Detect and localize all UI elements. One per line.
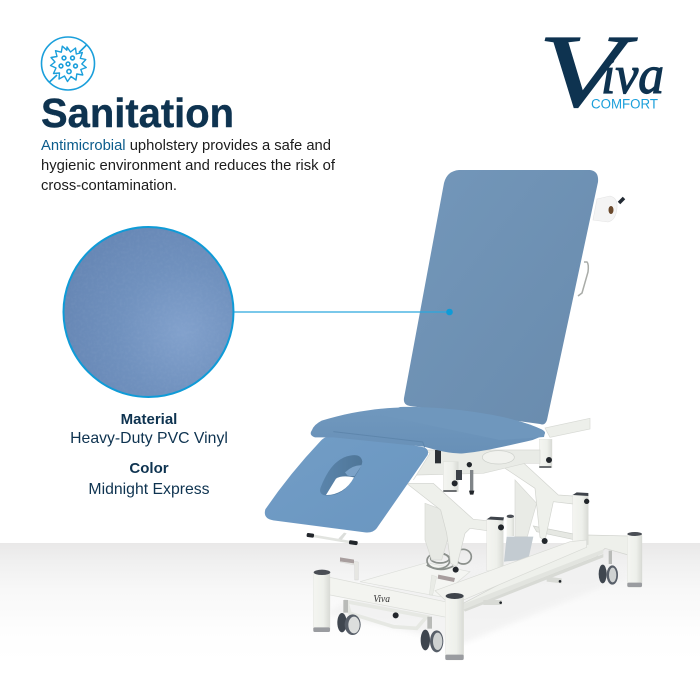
material and color labels: Heavy-Duty PVC Vinyl <box>70 430 228 447</box>
material and color labels: Midnight Express <box>88 481 210 498</box>
description text: hygienic environment and reduces the risk of <box>41 158 335 174</box>
callout line <box>234 309 453 315</box>
scissor arms <box>407 463 573 567</box>
front wheels <box>337 600 443 652</box>
cable bundle <box>427 549 471 569</box>
logo: Viva Comfort: V <box>538 13 638 129</box>
material and color labels <box>70 411 228 498</box>
seat section <box>311 407 545 453</box>
title: Sanitation <box>41 90 234 136</box>
logo: Viva Comfort: COMFORT <box>591 96 658 112</box>
material and color labels: Material <box>121 411 177 428</box>
seat overlap over backrest <box>380 407 545 440</box>
rear wheels <box>599 551 618 585</box>
leg rest handle <box>306 533 358 545</box>
upper frame under seat <box>413 418 590 495</box>
rear base frame <box>463 526 642 612</box>
front base frame <box>313 540 603 660</box>
side handle <box>578 262 588 296</box>
face section <box>265 437 428 532</box>
floor background <box>0 543 700 700</box>
logo on frame: Viva <box>373 594 390 605</box>
description text: Antimicrobial upholstery provides a safe and <box>41 138 331 154</box>
material and color labels: Color <box>129 460 169 477</box>
front pedal handle <box>340 557 455 595</box>
floor shadow <box>327 557 627 643</box>
material swatch <box>64 227 234 397</box>
central column <box>425 480 537 562</box>
paper roll <box>593 196 624 222</box>
description text <box>41 138 335 194</box>
face hole <box>320 455 362 495</box>
backrest cushion <box>404 170 624 424</box>
scissor posts and knobs <box>453 492 589 573</box>
description text: cross-contamination. <box>41 178 177 194</box>
logo: Viva Comfort <box>538 13 664 129</box>
logo: Viva Comfort: iva <box>601 45 664 105</box>
treatment table photo <box>265 407 642 660</box>
base plate <box>360 563 470 597</box>
icon: antimicrobial <box>42 37 94 90</box>
